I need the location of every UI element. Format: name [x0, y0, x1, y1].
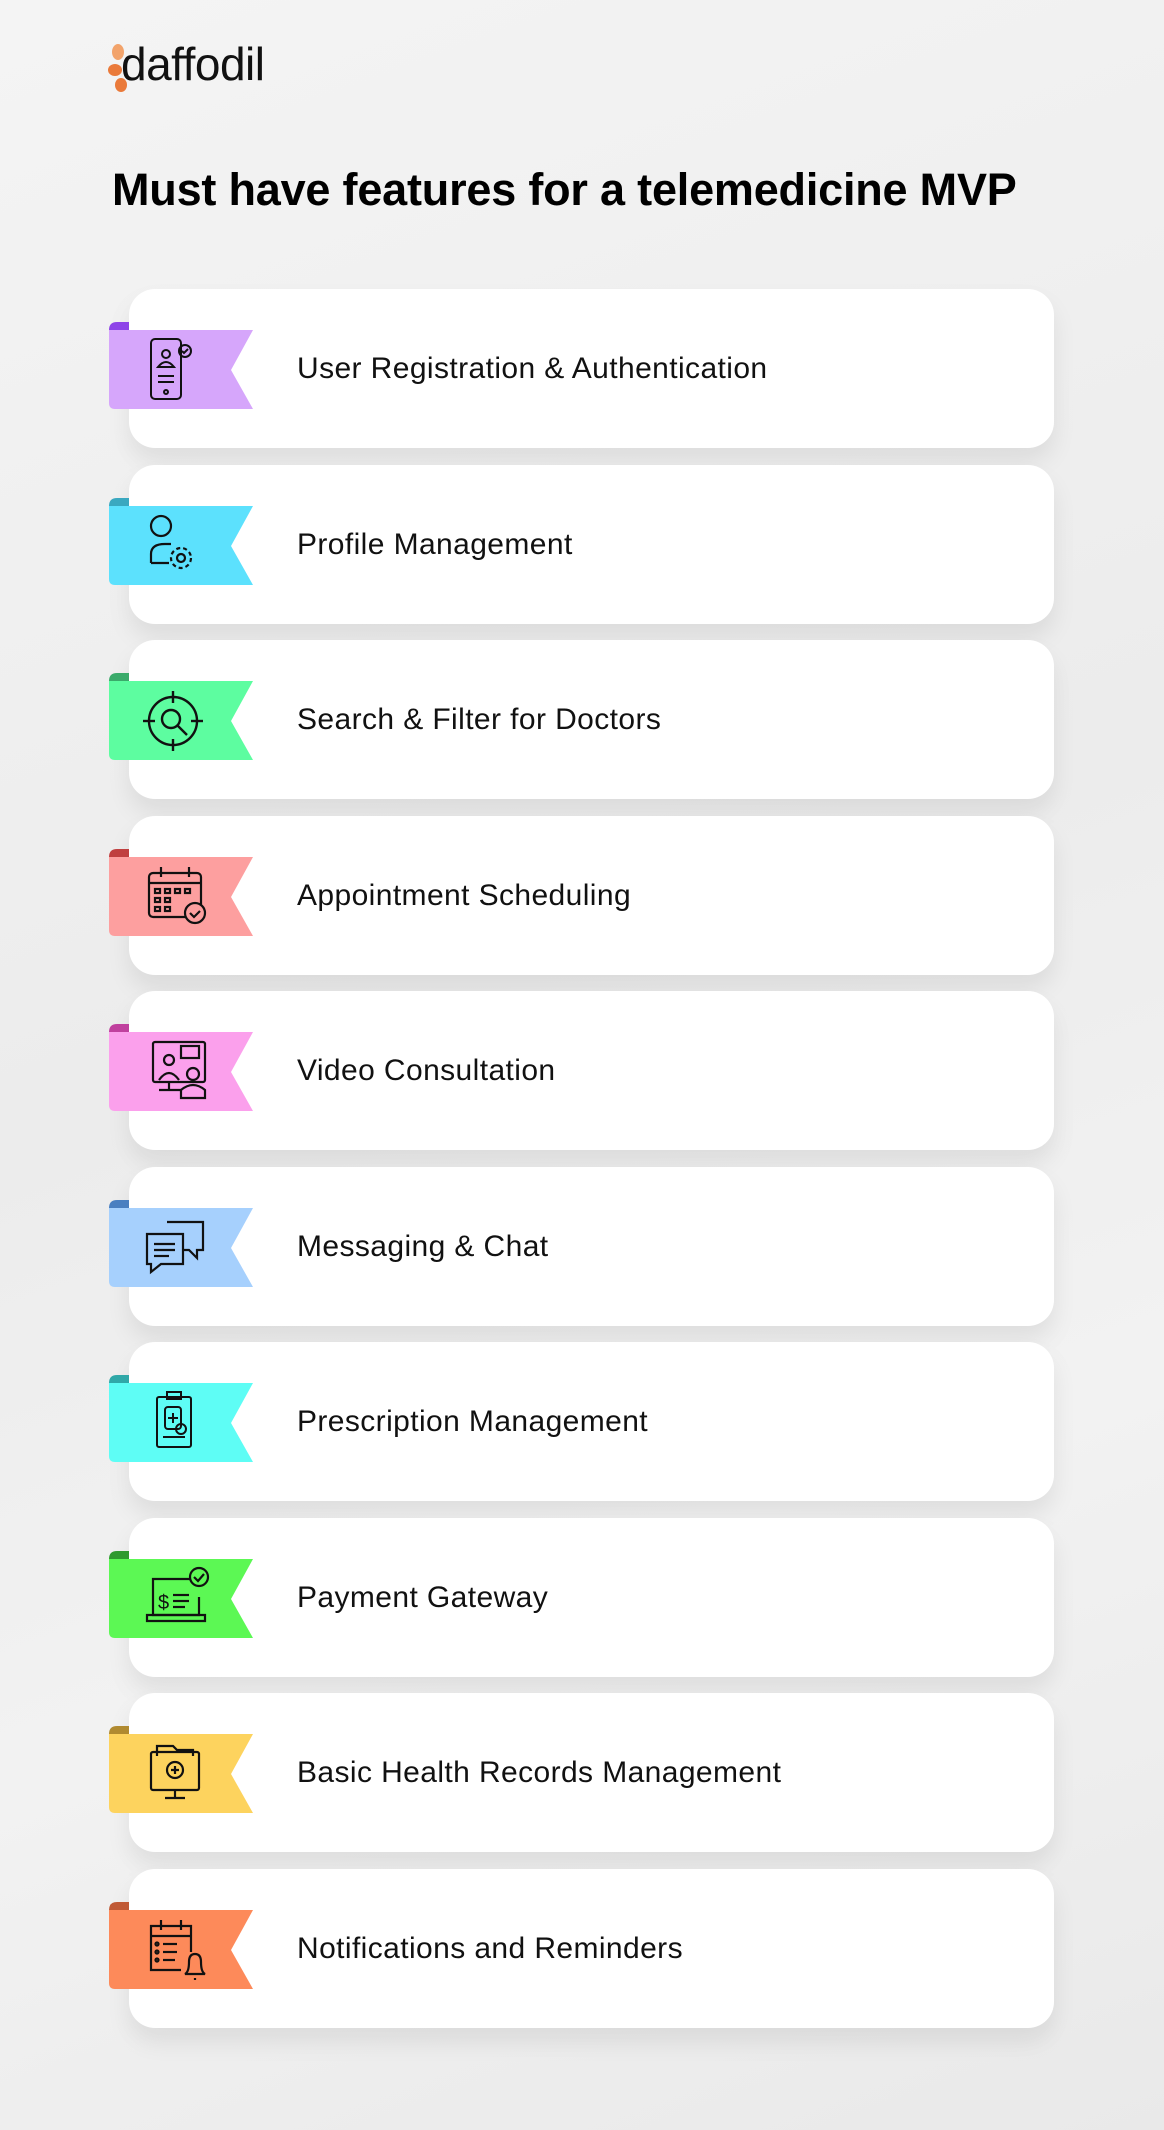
card: Appointment Scheduling: [129, 816, 1054, 974]
card: Messaging & Chat: Messaging & Chat: [297, 1230, 549, 1262]
card: Search & Filter: [129, 640, 1054, 799]
card: Notifications: Notifications and Reminders: [297, 1932, 683, 1964]
card: Payment Gateway: $: [158, 1592, 169, 1614]
title: Must have features for a telemedicine MVP: [112, 164, 1017, 215]
card: Basic Health Records: [129, 1693, 1054, 1852]
card: Notifications: [129, 1868, 1054, 2028]
card: Video Consultation: [129, 991, 1054, 1150]
card: Appointment Scheduling: Appointment Scheduling: [297, 878, 631, 912]
card: Search & Filter: Search & Filter for Doctors: [297, 703, 661, 736]
card: Payment Gateway: Payment Gateway: [297, 1580, 548, 1614]
logo: daffodil: [121, 38, 265, 90]
card: Video Consultation: Video Consultation: [297, 1054, 556, 1087]
card: User Registration: [129, 289, 1054, 448]
card: User Registration: User Registration & Authentication: [297, 352, 768, 385]
card: Messaging & Chat: [129, 1166, 1054, 1326]
card: Profile Management: [129, 464, 1054, 624]
card: Prescription Management: [129, 1342, 1054, 1501]
card: Profile Management: Profile Management: [297, 528, 573, 560]
card: Prescription Management: Prescription Management: [297, 1405, 648, 1438]
card: Basic Health Records: Basic Health Records Management: [297, 1756, 781, 1789]
card: Payment Gateway: [129, 1518, 1054, 1676]
